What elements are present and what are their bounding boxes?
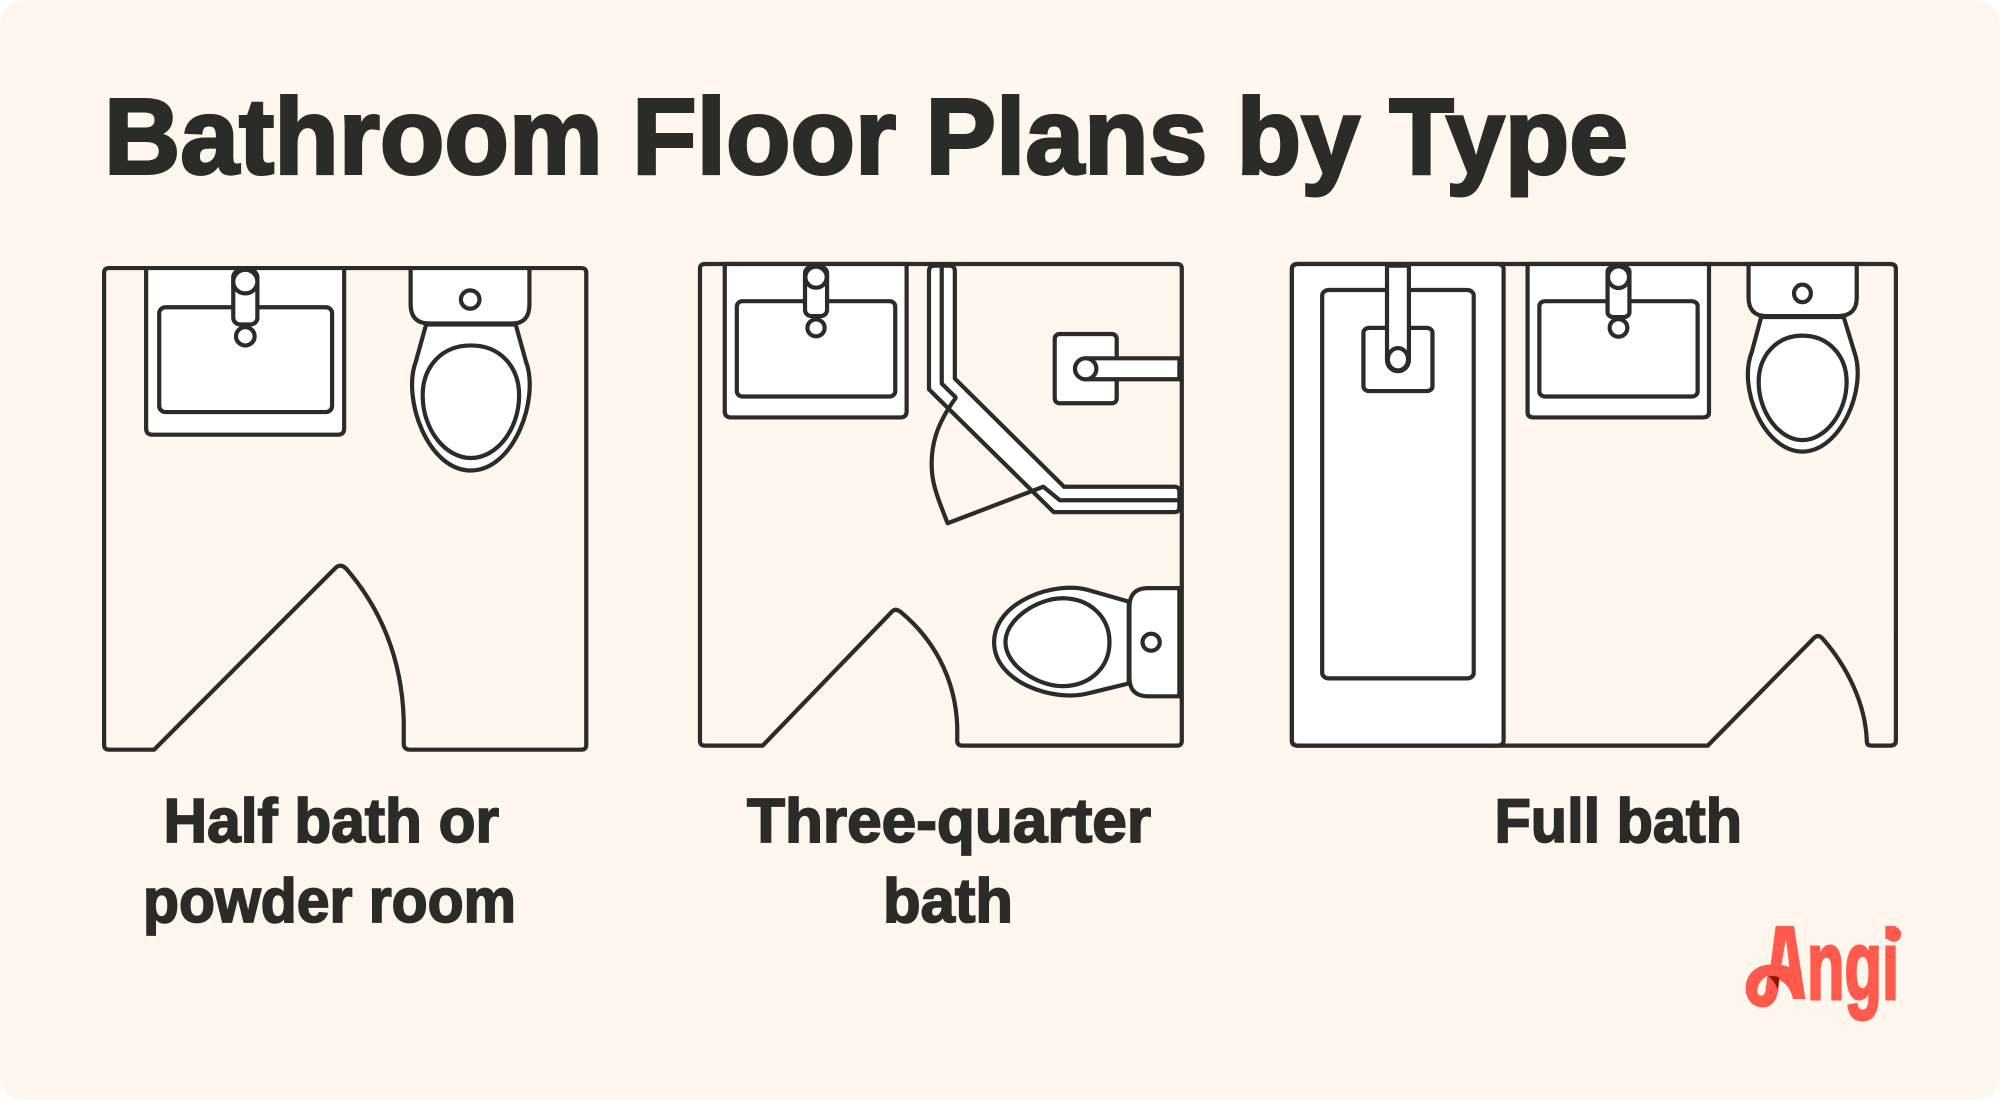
panel: three-quarter bath floor plan (700, 264, 1182, 746)
sink (1528, 264, 1709, 417)
label: half bath: powder room (143, 867, 516, 936)
room walls and door (700, 264, 1182, 746)
logo: Angi (1746, 926, 1902, 1022)
toilet (411, 268, 530, 471)
toilet (994, 588, 1179, 696)
logo: Angi: ngi (1807, 910, 1899, 1020)
shower enclosure (929, 266, 1179, 523)
panel: full bath floor plan (1292, 264, 1896, 746)
toilet (1748, 264, 1858, 452)
sink (146, 268, 344, 435)
label: three-quarter bath: Three-quarter (747, 787, 1151, 856)
label: three-quarter bath: bath (883, 867, 1013, 936)
shower head (1055, 334, 1179, 403)
label: half bath: Half bath or (164, 787, 499, 856)
label: three-quarter bath (747, 787, 1151, 936)
title: Bathroom Floor Plans by Type (104, 76, 1628, 197)
bathtub (1292, 264, 1504, 746)
panel: half bath floor plan (104, 268, 586, 750)
room walls and door (1292, 264, 1896, 746)
logo: Angi: A (1768, 904, 1807, 1022)
sink (725, 264, 907, 417)
label: full bath: Full bath (1494, 787, 1742, 856)
label: half bath (143, 787, 516, 936)
room walls and door (104, 268, 586, 750)
